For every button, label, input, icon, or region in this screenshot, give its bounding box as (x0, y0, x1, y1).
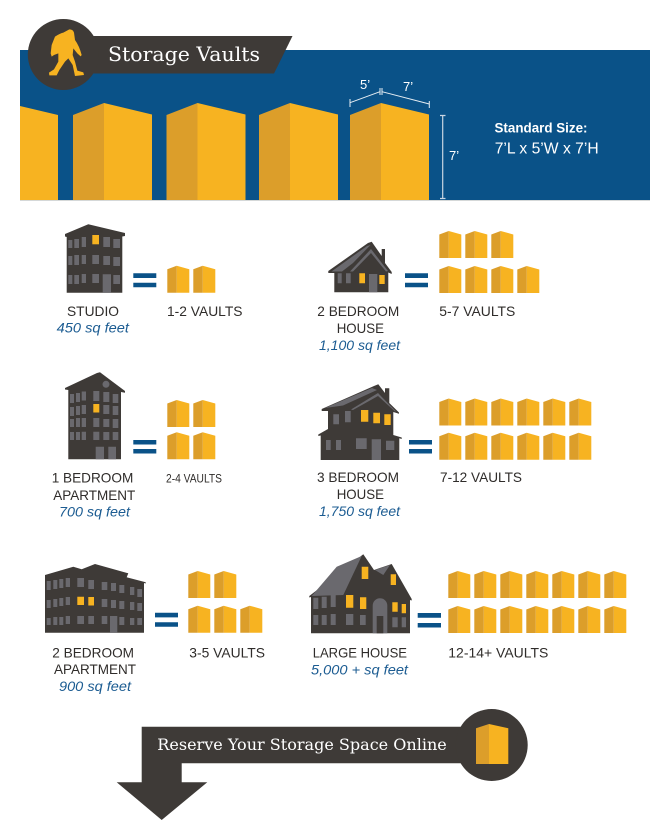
standard size text (494, 120, 599, 157)
equals sign (155, 613, 178, 627)
panel: storage vaults header (20, 19, 650, 201)
label: 2 bedroom apartment: APARTMENT (54, 661, 136, 677)
panel: 3 bedroom house (317, 384, 591, 519)
equals sign (133, 273, 156, 287)
panel: studio (57, 224, 243, 336)
panel: large house (309, 554, 626, 677)
icon: apartment tower (65, 372, 125, 459)
label: 2 bedroom apartment: 900 sq feet (59, 679, 132, 694)
label: large house (311, 644, 409, 677)
label: studio: 450 sq feet (57, 321, 130, 336)
label: 2 bedroom house: 2 BEDROOM (317, 303, 399, 319)
label: 1 bedroom apartment: 700 sq feet (59, 505, 131, 520)
arrow banner (117, 727, 470, 820)
label: 12-14+ vaults: 12-14+ VAULTS (448, 644, 548, 660)
title ribbon (28, 19, 293, 90)
equals sign (418, 613, 441, 628)
label: 3 bedroom house: 1,750 sq feet (319, 504, 401, 519)
label: 2-4 vaults: 2-4 VAULTS (166, 474, 222, 486)
icon: small house (328, 242, 392, 292)
label: large house: 5,000 + sq feet (311, 662, 409, 677)
label: 2 bedroom house: HOUSE (337, 320, 384, 336)
label: 2 bedroom house: 1,100 sq feet (319, 338, 401, 353)
dimension markers (350, 77, 459, 199)
label: 5-7 vaults: 5-7 VAULTS (439, 303, 515, 319)
equals sign (133, 440, 156, 454)
vault icons: 2 (167, 266, 215, 293)
blue banner background (20, 50, 650, 200)
label: 3-5 vaults: 3-5 VAULTS (189, 644, 265, 660)
vault icons: 12 (439, 398, 591, 460)
label: 1 bedroom apartment: APARTMENT (53, 487, 136, 503)
panel: 1 bedroom apartment (52, 372, 222, 520)
panel: 2 bedroom apartment (45, 564, 265, 694)
equals sign (405, 273, 428, 287)
panel: reserve online call to action (117, 709, 528, 820)
label: 1-2 vaults: 1-2 VAULTS (167, 303, 242, 319)
icon: two storey house (318, 384, 402, 460)
circle badge with vault (456, 709, 528, 781)
dimension markers: 5’ (360, 77, 370, 92)
label: 7-12 vaults: 7-12 VAULTS (440, 469, 522, 485)
vault icons: 14 (448, 571, 626, 633)
panel: 2 bedroom house (317, 231, 539, 353)
standard size text: 7’L x 5’W x 7’H (495, 140, 599, 157)
label: 1 bedroom apartment (52, 470, 136, 520)
dimension markers: 7’ (403, 79, 413, 94)
vault icons: 7 (439, 231, 539, 293)
dimension markers: 7’ (449, 148, 459, 163)
label: large house: LARGE HOUSE (313, 644, 407, 660)
label: 2 bedroom apartment (52, 644, 136, 694)
label: 3 bedroom house: 3 BEDROOM (317, 469, 399, 485)
standard size text: Standard Size: (494, 120, 588, 136)
label: studio: STUDIO (67, 303, 119, 319)
vault icons: 5 (188, 571, 262, 633)
label: studio (57, 303, 130, 336)
equals sign (409, 440, 432, 454)
label: 3 bedroom house (317, 469, 401, 519)
label: 2 bedroom apartment: 2 BEDROOM (52, 644, 134, 660)
icon: wide apartment block (45, 564, 146, 633)
vault icons: 4 (167, 400, 215, 459)
icon: bigfoot (49, 29, 84, 76)
icon: studio building (65, 224, 125, 293)
call to action text: Reserve Your Storage Space Online (157, 736, 447, 754)
label: 3 bedroom house: HOUSE (337, 486, 384, 502)
icon: large house (309, 554, 412, 633)
large vaults row (20, 103, 429, 200)
label: 1 bedroom apartment: 1 BEDROOM (52, 470, 133, 486)
title text: Storage Vaults (108, 42, 260, 66)
label: 2 bedroom house (317, 303, 401, 353)
